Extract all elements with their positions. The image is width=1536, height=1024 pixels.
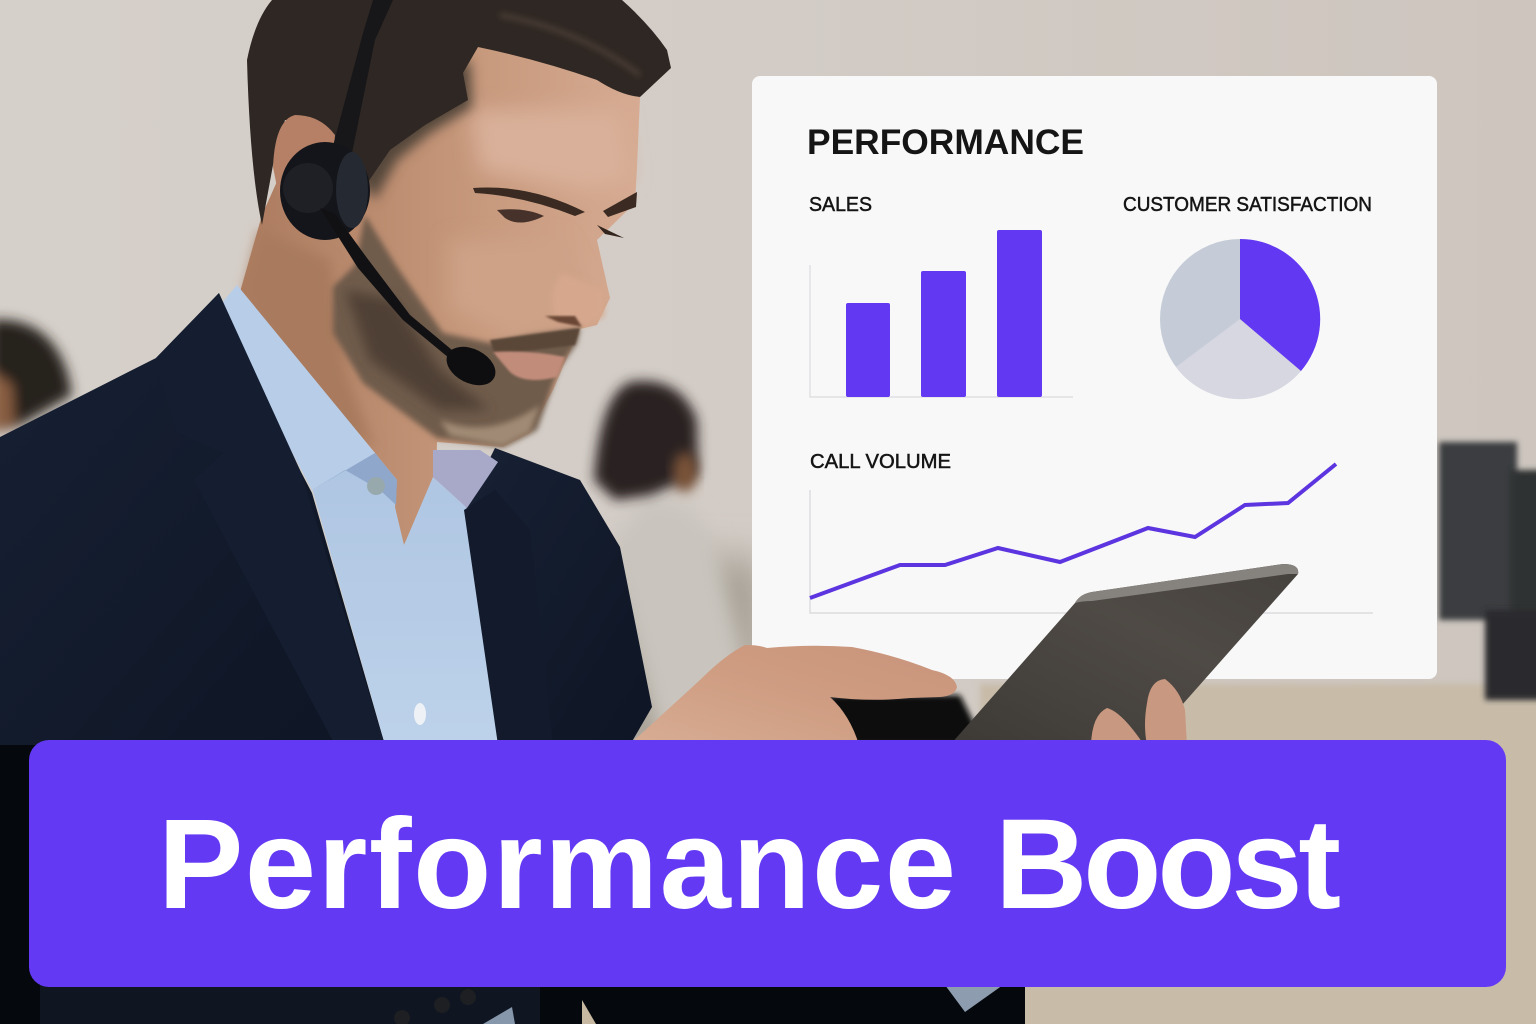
man [0, 0, 1025, 1024]
collar right [433, 450, 498, 508]
collar left [216, 285, 375, 490]
blurred coworker left [0, 320, 72, 432]
shirt [312, 453, 498, 745]
eyes and brows [473, 188, 637, 238]
headset [280, 0, 502, 393]
banner [29, 740, 1506, 987]
sales label: SALES [809, 194, 872, 216]
sales bar chart [810, 230, 1073, 397]
satisfaction pie chart [1160, 239, 1320, 399]
earcup [280, 142, 370, 240]
call volume label: CALL VOLUME [810, 451, 951, 473]
lips [493, 352, 565, 380]
hair [247, 0, 671, 225]
nose [545, 272, 604, 327]
jacket right [464, 448, 652, 745]
lapel left [156, 293, 385, 745]
jacket left [0, 293, 385, 745]
shirt buttons [367, 477, 426, 725]
blurred monitors right [1439, 442, 1536, 700]
boom microphone [320, 208, 502, 393]
lapel right [464, 490, 553, 745]
headband [330, 0, 393, 163]
panel heading: PERFORMANCE [807, 123, 1084, 162]
banner title: Boost [995, 793, 1341, 936]
shadow under finger [825, 695, 985, 745]
tablet [950, 564, 1298, 745]
blurred coworker centre [594, 381, 760, 745]
lower jacket below banner [0, 741, 1025, 1024]
ear [273, 115, 335, 212]
banner title: Performance [158, 793, 956, 936]
hand [629, 645, 1187, 745]
call volume line chart [810, 464, 1373, 613]
collar band [312, 453, 397, 505]
beard [333, 215, 580, 447]
dashboard panel [752, 76, 1437, 679]
face highlights [245, 110, 630, 450]
satisfaction label: CUSTOMER SATISFACTION [1123, 194, 1372, 216]
neck and face [240, 40, 640, 545]
